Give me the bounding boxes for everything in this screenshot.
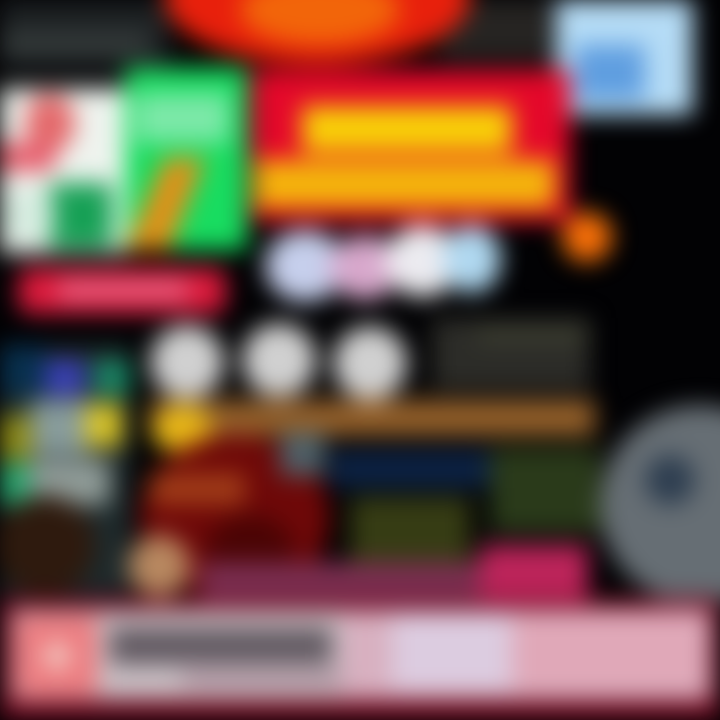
panel: left white and green [0, 88, 125, 253]
footer pale middle [392, 615, 512, 690]
panel: green arrow [125, 68, 247, 250]
pale circle [0, 188, 55, 243]
olive patch [0, 415, 32, 460]
row of pale circles [246, 206, 520, 321]
mascot eye [645, 455, 695, 505]
title line one: Title [302, 106, 363, 139]
top centre backdrop [440, 0, 550, 60]
footer text [110, 628, 332, 664]
title line two [255, 160, 555, 208]
olive box [350, 497, 470, 571]
grey text line [477, 326, 587, 342]
sand figure [128, 535, 190, 597]
green patch [95, 360, 130, 395]
top left header backdrop [0, 0, 170, 70]
sky circle [443, 225, 501, 293]
blue patch [0, 345, 45, 395]
green edge [0, 463, 30, 505]
pink band [200, 562, 480, 600]
orange bar [150, 400, 595, 436]
sphere label [150, 473, 245, 505]
navy bar [330, 450, 500, 488]
pale top [135, 93, 230, 143]
bottom maroon base [0, 598, 720, 720]
white circle three [333, 326, 407, 400]
pale patch [30, 400, 90, 455]
pill text: Label [58, 280, 100, 297]
grey mid [30, 460, 110, 505]
top right blue logo [555, 0, 693, 115]
sphere dark core [205, 515, 295, 595]
sun badge core [240, 0, 400, 45]
left colourful collage [0, 345, 130, 595]
green corner [50, 183, 112, 248]
magenta box [480, 545, 588, 600]
red accent [25, 93, 75, 153]
title line two: Subtitle [255, 160, 365, 193]
logo mark [575, 45, 645, 100]
pale block by sphere [280, 432, 325, 476]
pale blue circle [265, 230, 345, 302]
dark red sphere [140, 435, 330, 600]
footer icon centre [43, 642, 71, 670]
footer icon [17, 616, 97, 696]
footer text: Footer [110, 628, 191, 658]
footer text second line [182, 672, 342, 686]
yellow patch [85, 403, 123, 447]
footer panel [12, 610, 710, 700]
white circle two [242, 323, 316, 397]
white circle one [150, 325, 224, 399]
yellow badge [152, 405, 212, 453]
red stripe [0, 143, 55, 171]
purple patch [45, 360, 85, 395]
top sun badge [165, 0, 470, 65]
footer pink right [512, 615, 702, 690]
pink circle [330, 235, 400, 300]
white circle [385, 225, 460, 297]
header grey streak [0, 30, 150, 55]
small orange dot [562, 212, 612, 262]
dark brown ball [0, 495, 95, 595]
red label pill [18, 268, 226, 314]
title line one [302, 106, 512, 152]
pill text [58, 280, 188, 300]
footer pale left [12, 610, 342, 700]
olive text [490, 448, 600, 533]
grey text block [432, 318, 590, 390]
right grey mascot [600, 405, 720, 605]
panel: red title [252, 70, 570, 222]
icon: orange arrow [125, 158, 205, 250]
